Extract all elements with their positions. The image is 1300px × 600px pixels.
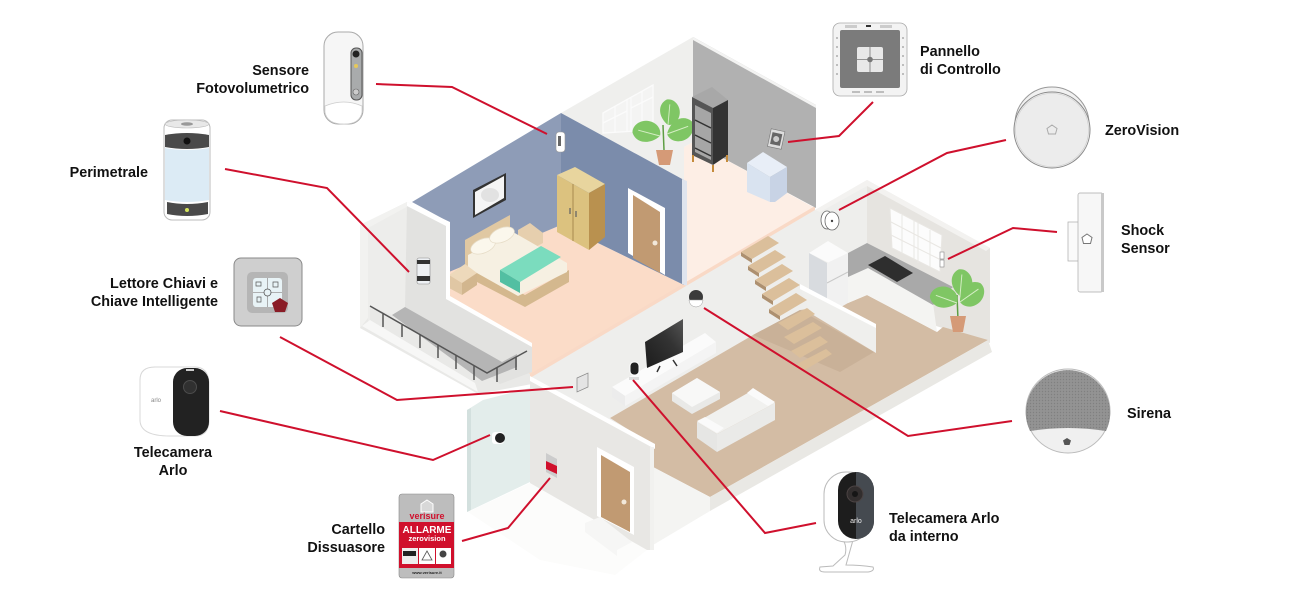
label: shock sensor: Shock bbox=[1121, 223, 1165, 239]
kitchen window bbox=[890, 208, 942, 272]
line: perimetrale bbox=[225, 169, 409, 272]
balcony railing bbox=[370, 306, 527, 382]
sofa bbox=[697, 388, 775, 452]
marker: perimeter sensor bbox=[417, 258, 430, 284]
label: pannello: Pannello bbox=[920, 44, 980, 60]
wall: grey wall top edge bbox=[693, 37, 816, 108]
line: pannello bbox=[788, 102, 873, 142]
white cabinet bbox=[747, 152, 787, 202]
line: arlo interno bbox=[633, 380, 816, 533]
upper right floor bbox=[530, 142, 815, 378]
marker: key reader bbox=[577, 373, 588, 392]
lower floor bbox=[530, 180, 867, 470]
partition wall bbox=[405, 203, 532, 384]
glass panel left edge bbox=[467, 408, 471, 512]
brand: arlo: arlo bbox=[151, 398, 162, 404]
wall: grey right room bbox=[693, 37, 816, 208]
label: lettore: Chiave Intelligente bbox=[91, 294, 218, 310]
label: telecamera arlo: Telecamera bbox=[134, 445, 213, 461]
left wing base bbox=[360, 202, 532, 394]
marker: zerovision bbox=[821, 211, 839, 230]
line: sirena bbox=[704, 308, 1012, 436]
brand: arlo interno: arlo bbox=[850, 518, 862, 525]
wall: blue left bbox=[412, 113, 561, 272]
line: zerovision bbox=[839, 140, 1006, 210]
kitchen wall top bbox=[815, 180, 990, 251]
bedroom floor bbox=[449, 225, 684, 376]
marker: indoor camera bbox=[629, 362, 639, 380]
bed: mattress bbox=[468, 232, 567, 296]
device: sensore fotovolumetrico bbox=[324, 32, 363, 124]
marker: siren bbox=[689, 290, 703, 307]
bed: headboard bbox=[465, 215, 510, 268]
fridge bbox=[809, 241, 848, 307]
front wall top edge bbox=[530, 376, 655, 449]
wall: blue wall edge bbox=[682, 179, 687, 286]
label: lettore: Lettore Chiavi e bbox=[110, 276, 218, 292]
device: cartello dissuasore: www.verisure.it bbox=[411, 570, 442, 575]
bed bbox=[465, 215, 569, 307]
device: cartello dissuasore: verisure bbox=[409, 511, 445, 521]
label: sirena: Sirena bbox=[1127, 406, 1172, 422]
bed: wooden base bbox=[477, 268, 569, 307]
bed: blanket side bbox=[500, 270, 520, 293]
partition top edge bbox=[407, 202, 532, 347]
leader lines bbox=[220, 84, 1057, 541]
kitchen counter bbox=[848, 243, 953, 332]
label: perimetrale: Perimetrale bbox=[70, 165, 148, 181]
picture frame bbox=[473, 173, 506, 218]
front wall bbox=[530, 378, 653, 550]
entrance step bbox=[585, 517, 632, 556]
ground shadow at entrance bbox=[468, 483, 647, 575]
plant: kitchen bbox=[927, 268, 990, 332]
device: pannello di controllo bbox=[833, 23, 907, 96]
line: sensore bbox=[376, 84, 547, 134]
glass panel bbox=[467, 388, 530, 512]
label: zerovision: ZeroVision bbox=[1105, 123, 1179, 139]
door: entrance bbox=[597, 447, 634, 535]
floor base strip bbox=[710, 340, 992, 511]
tv bbox=[645, 319, 683, 372]
device markers on the house bbox=[417, 129, 944, 478]
counter: cooktop bbox=[868, 256, 913, 282]
device: cartello dissuasore: ALLARME bbox=[403, 525, 452, 536]
line: arlo bbox=[220, 411, 490, 460]
balcony white strip bbox=[362, 320, 478, 392]
marker: shock sensor bbox=[940, 252, 944, 267]
marker: deterrent sign bbox=[546, 453, 557, 478]
bedside table: back bbox=[518, 223, 543, 250]
marker: arlo camera bbox=[492, 432, 505, 444]
label: telecamera arlo interno: da interno bbox=[889, 529, 959, 545]
device: telecamera arlo interno bbox=[820, 472, 874, 572]
under-stair shade bbox=[753, 310, 874, 372]
tv cabinet bbox=[612, 333, 716, 406]
entrance recess bbox=[653, 467, 710, 545]
line: shock bbox=[948, 228, 1057, 259]
label: telecamera arlo: Arlo bbox=[159, 463, 188, 479]
label: telecamera arlo interno: Telecamera Arlo bbox=[889, 511, 1000, 527]
balcony grey floor bbox=[392, 307, 517, 381]
brown floor bbox=[610, 295, 988, 497]
stairs bbox=[741, 236, 832, 371]
label: sensore: Fotovolumetrico bbox=[196, 81, 309, 97]
house: isometric cutaway bbox=[360, 37, 992, 575]
label: pannello: di Controllo bbox=[920, 62, 1001, 78]
counter: cabinets bbox=[848, 268, 937, 332]
device: cartello dissuasore: zerovision bbox=[408, 534, 446, 543]
device: sirena bbox=[1026, 369, 1110, 453]
bed: pillows bbox=[468, 224, 517, 257]
marker: control panel bbox=[767, 129, 785, 149]
line: lettore bbox=[280, 337, 573, 400]
marker: photo sensor bbox=[556, 132, 565, 152]
kitchen back wall bbox=[867, 180, 990, 343]
device: perimetrale bbox=[164, 120, 210, 220]
half wall by stairs bbox=[800, 284, 876, 353]
line: cartello bbox=[462, 478, 550, 541]
label: sensore: Sensore bbox=[252, 63, 309, 79]
label: cartello: Dissuasore bbox=[307, 540, 385, 556]
shelf unit bbox=[692, 87, 728, 172]
device: zerovision bbox=[1014, 87, 1090, 168]
window: upper room bbox=[603, 85, 653, 133]
device: telecamera arlo bbox=[140, 367, 209, 436]
coffee table bbox=[672, 378, 720, 414]
bedside table: front bbox=[449, 264, 477, 295]
back white wall bbox=[561, 37, 693, 180]
device: cartello dissuasore bbox=[399, 494, 454, 578]
label: cartello: Cartello bbox=[331, 522, 385, 538]
device: shock sensor bbox=[1068, 193, 1104, 292]
front wall right side bbox=[650, 447, 654, 550]
wall: blue right bbox=[561, 113, 684, 285]
counter: top bbox=[848, 243, 953, 305]
left wing inner wall bbox=[368, 203, 407, 322]
upper floor edge strip bbox=[530, 206, 815, 380]
device: lettore chiavi bbox=[234, 258, 302, 326]
bed: green blanket bbox=[500, 246, 561, 282]
door: bedroom bbox=[628, 188, 665, 275]
left wing top edge bbox=[360, 202, 412, 328]
plant: upper room bbox=[630, 99, 697, 165]
label: shock sensor: Sensor bbox=[1121, 241, 1170, 257]
wardrobe bbox=[557, 167, 605, 250]
